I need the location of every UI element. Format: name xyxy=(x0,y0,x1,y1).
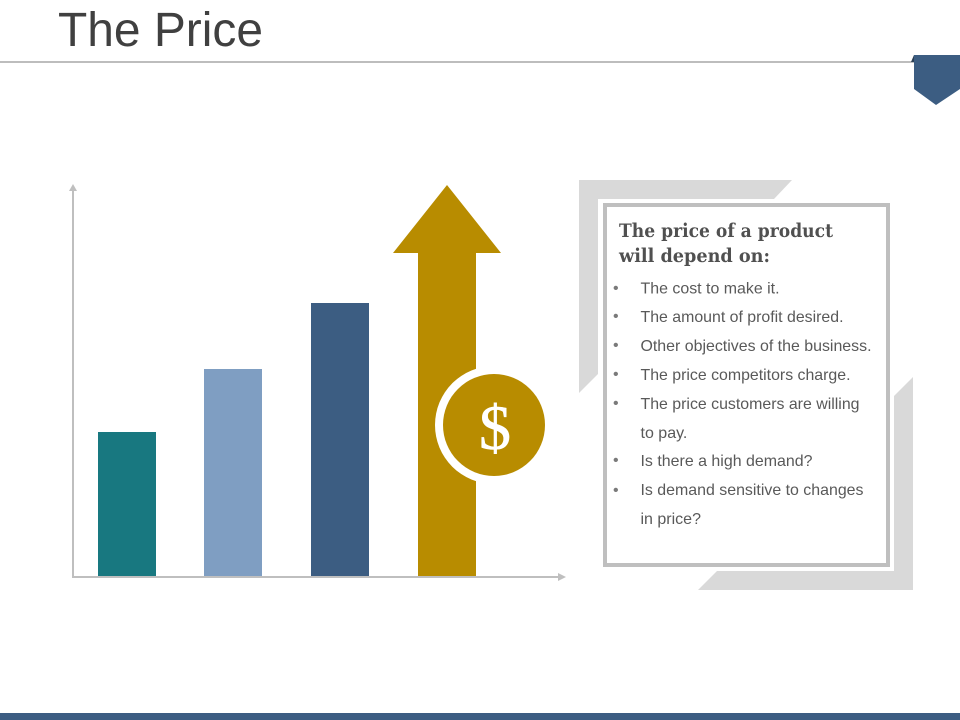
bar 2: light blue xyxy=(204,369,262,576)
bottom-right gray bracket xyxy=(698,377,913,590)
top-left gray bracket xyxy=(579,180,792,393)
bullet list: Other objectives of the business. xyxy=(640,338,872,355)
title: The Price xyxy=(58,3,263,57)
bar chart xyxy=(69,184,566,581)
bullet list: • xyxy=(613,395,619,412)
bar 1: teal xyxy=(98,432,156,576)
bullet list: Is demand sensitive to changes xyxy=(640,482,864,499)
icon: corner ribbon badge xyxy=(911,55,960,105)
bar 3: dark blue xyxy=(311,303,369,576)
bullet list: to pay. xyxy=(640,425,687,442)
bar 4: gold arrow xyxy=(393,185,501,576)
bullet list: in price? xyxy=(640,511,701,528)
bullet list: • xyxy=(613,337,619,354)
chart axes xyxy=(69,184,566,581)
bullet list: The price customers are willing xyxy=(640,396,860,413)
panel heading: will depend on: xyxy=(618,245,770,267)
bullet list: Is there a high demand? xyxy=(640,453,813,470)
footer bar xyxy=(0,713,960,720)
bullet list: • xyxy=(613,280,619,297)
white text box xyxy=(605,205,888,565)
icon: dollar coin: $ xyxy=(479,392,511,463)
bullet list: • xyxy=(613,452,619,469)
panel heading xyxy=(618,220,833,267)
panel heading: The price of a product xyxy=(619,220,833,242)
icon: dollar coin xyxy=(435,366,553,484)
bullet list: The amount of profit desired. xyxy=(640,309,844,326)
bullet list xyxy=(613,280,872,528)
bullet list: • xyxy=(613,482,619,499)
bullet list: The price competitors charge. xyxy=(640,367,850,384)
bullet list: • xyxy=(613,366,619,383)
text panel frame xyxy=(579,180,913,590)
bullet list: • xyxy=(613,308,619,325)
bullet list: The cost to make it. xyxy=(640,280,780,298)
